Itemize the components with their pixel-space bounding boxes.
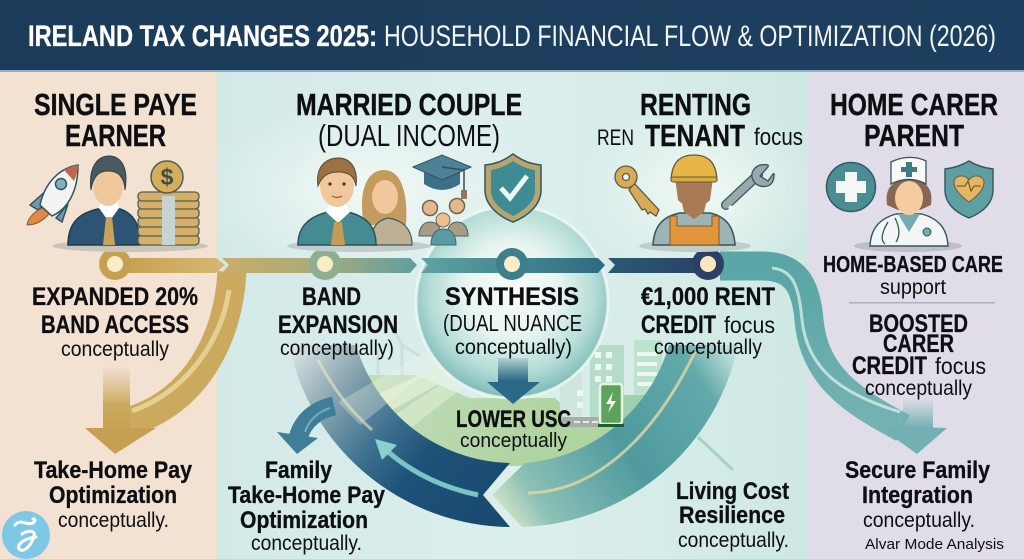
text: take-home pay optimization: Optimization xyxy=(49,482,177,509)
text: band expansion: conceptually) xyxy=(280,337,394,360)
text: home-based care xyxy=(823,251,1003,299)
text: boosted carer credit: conceptually xyxy=(865,377,972,400)
icon: medical cross xyxy=(826,162,876,212)
heading: married couple: MARRIED COUPLE xyxy=(296,87,522,122)
heading: renting tenant xyxy=(597,87,803,153)
text: secure family integration: Secure Family xyxy=(845,457,991,484)
heading: home carer parent xyxy=(830,87,998,153)
text: rent credit: focus xyxy=(724,312,775,338)
text: band expansion: BAND xyxy=(302,283,361,311)
node 1 xyxy=(99,248,131,280)
diagram: central ring flow xyxy=(277,206,738,527)
node 2 xyxy=(309,248,341,280)
icon: shield with check xyxy=(485,154,541,222)
header banner xyxy=(0,0,1024,72)
heading: renting tenant: TENANT xyxy=(645,118,745,153)
text: expanded 20% band access: BAND ACCESS xyxy=(41,311,189,339)
icon: dollar coin xyxy=(151,161,183,193)
icon: woman xyxy=(362,170,412,245)
text: lower USC: LOWER USC xyxy=(456,406,571,433)
text: home-based care: support xyxy=(880,276,946,299)
text: secure family integration: Integration xyxy=(862,482,973,509)
icon group: renting tenant xyxy=(615,155,774,252)
icon: family group xyxy=(419,198,468,245)
flow bar xyxy=(99,248,724,280)
icon: key xyxy=(615,166,659,216)
text: synthesis: (DUAL NUANCE xyxy=(443,310,582,336)
icon: heart shield xyxy=(945,161,993,218)
icon: receipt strip xyxy=(162,196,175,245)
ring pale highlight xyxy=(318,360,372,430)
text: boosted carer credit: CARER xyxy=(883,330,954,358)
text: family take-home pay: conceptually. xyxy=(251,532,362,555)
arrow: cyan return on ring xyxy=(375,439,478,495)
text: band expansion: EXPANSION xyxy=(278,311,398,339)
icon group: couple and family xyxy=(287,154,541,252)
heading: home carer parent: PARENT xyxy=(864,118,964,153)
text: lower USC xyxy=(456,406,571,452)
text: rent credit xyxy=(641,283,775,359)
node 3 xyxy=(496,248,528,280)
heading: renting tenant: REN xyxy=(597,125,634,150)
text: rent credit: conceptually xyxy=(654,336,762,359)
text: expanded 20% band access: conceptually xyxy=(61,338,169,361)
icon: nurse xyxy=(870,157,948,246)
text: secure family integration xyxy=(845,457,991,532)
text: synthesis: SYNTHESIS xyxy=(445,283,579,311)
icon: dollar coin: $ xyxy=(161,164,174,190)
arrow: gold flow to take-home pay xyxy=(85,272,232,454)
icon: coin stack xyxy=(138,192,199,245)
icon: wrench xyxy=(726,165,774,210)
text: family take-home pay xyxy=(228,457,386,555)
heading: renting tenant: focus xyxy=(754,124,803,151)
ring left navy arc xyxy=(289,345,510,527)
text: boosted carer credit xyxy=(852,310,986,400)
ring left light rays xyxy=(338,352,440,425)
text: take-home pay optimization: Take-Home Pay xyxy=(34,457,193,484)
text: family take-home pay: Optimization xyxy=(240,507,368,534)
text: rent credit: CREDIT xyxy=(641,311,716,339)
icon group: single earner xyxy=(27,156,208,252)
text: take-home pay optimization: conceptually. xyxy=(58,509,169,532)
text: source credit: Alvar Mode Analysis xyxy=(865,536,1004,553)
icon: graduation cap xyxy=(413,155,471,199)
text: boosted carer credit: BOOSTED xyxy=(869,310,968,338)
synthesis globe xyxy=(416,206,608,398)
heading: renting tenant: RENTING xyxy=(640,87,751,122)
heading: single PAYE earner xyxy=(34,87,197,153)
arrow: teal flow to secure family xyxy=(720,266,947,454)
icon: EV charger xyxy=(598,384,624,427)
text: living cost resilience: conceptually. xyxy=(678,529,789,552)
text: rent credit: €1,000 RENT xyxy=(641,283,775,311)
heading: married couple xyxy=(296,87,522,153)
icon: businessman xyxy=(68,156,140,245)
text: synthesis: conceptually) xyxy=(455,336,572,359)
heading: single PAYE earner: EARNER xyxy=(65,118,166,153)
heading: married couple: (DUAL INCOME) xyxy=(318,118,500,153)
text: take-home pay optimization xyxy=(34,457,193,532)
text: boosted carer credit: CREDIT xyxy=(852,352,927,380)
text: secure family integration: conceptually. xyxy=(863,509,975,532)
panel: single PAYE earner background xyxy=(0,70,217,559)
connector: living cost xyxy=(698,437,733,470)
title: IRELAND TAX CHANGES 2025: xyxy=(28,20,377,53)
ring gold highlight xyxy=(528,352,695,493)
arrow: synthesis down to lower USC xyxy=(487,358,540,404)
icon: logo badge xyxy=(2,511,50,559)
text: family take-home pay: Take-Home Pay xyxy=(228,482,386,509)
ring right teal arc xyxy=(492,345,738,527)
text: expanded 20% band access: EXPANDED 20% xyxy=(32,283,198,311)
text: living cost resilience: Resilience xyxy=(679,502,785,529)
text: lower USC: conceptually xyxy=(460,430,567,452)
text: band expansion xyxy=(278,283,398,360)
text: living cost resilience: Living Cost xyxy=(676,478,789,505)
wind turbine xyxy=(378,322,420,378)
text: family take-home pay: Family xyxy=(265,457,333,484)
icon: worker xyxy=(653,155,735,245)
arrow: family branch xyxy=(277,406,334,454)
icon group: home carer xyxy=(826,157,993,252)
green ground with city xyxy=(368,322,662,466)
text: living cost resilience xyxy=(676,478,789,552)
icon: man xyxy=(298,158,376,245)
text: synthesis xyxy=(443,283,582,359)
title xyxy=(28,20,996,53)
heading: single PAYE earner: SINGLE PAYE xyxy=(34,87,197,122)
panel: couple and renter background xyxy=(217,70,808,559)
panel: home carer background xyxy=(808,70,1024,559)
text: expanded 20% band access xyxy=(32,283,198,361)
text: boosted carer credit: focus xyxy=(935,353,986,379)
icon: rocket xyxy=(27,165,78,225)
node 4 xyxy=(692,248,724,280)
